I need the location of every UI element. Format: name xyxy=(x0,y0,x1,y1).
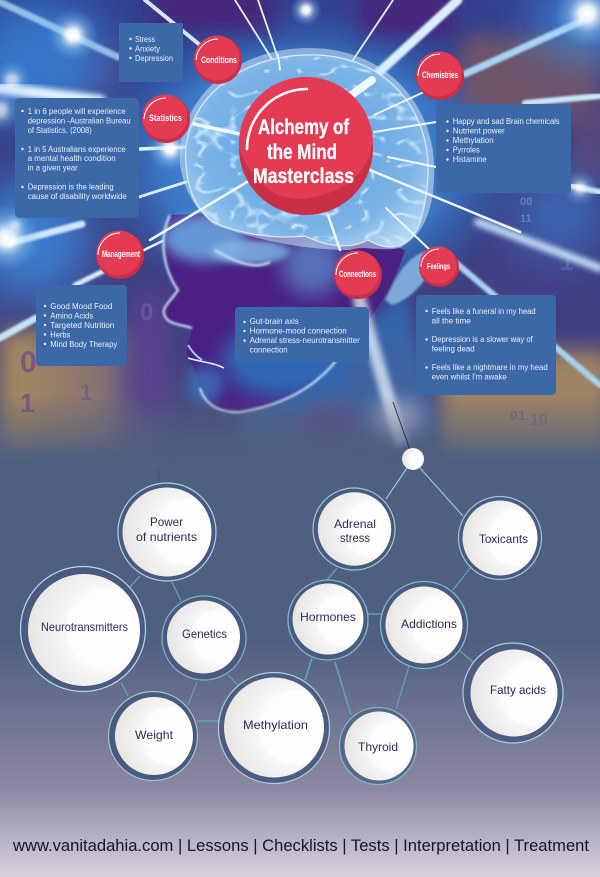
panel: conditions xyxy=(119,23,183,82)
panel: statistics: 1 in 5 Australians experience xyxy=(28,145,126,154)
orb: Toxicants xyxy=(458,496,542,580)
background binary digits: 1 xyxy=(518,13,531,40)
orb: Fatty acids: Fatty acids xyxy=(490,683,546,697)
orb: Addictions xyxy=(380,582,468,668)
background binary digits: 01 xyxy=(510,407,526,423)
panel: statistics: 1 in 6 people will experience xyxy=(28,107,126,116)
panel: conditions: Depression xyxy=(135,54,173,63)
panel: chemistries: Nutrient power xyxy=(453,126,505,136)
orb: Methylation xyxy=(218,672,330,784)
background binary digits xyxy=(20,13,573,429)
panel: feelings: even whilst I'm awake xyxy=(432,372,507,382)
panel: statistics: depression -Australian Bureau xyxy=(28,116,131,126)
panel: feelings xyxy=(416,295,556,395)
central circle: title: Masterclass xyxy=(253,165,354,188)
background binary digits: 10 xyxy=(530,412,548,429)
central circle: title: the Mind xyxy=(267,141,337,164)
panel: chemistries: Histamine xyxy=(453,155,487,164)
panel: chemistries xyxy=(436,104,571,193)
orb: Fatty acids xyxy=(463,643,563,743)
node: Feelings xyxy=(419,246,459,287)
panel: statistics: of Statistics. (2008) xyxy=(28,126,92,135)
orb: Weight: Weight xyxy=(135,728,174,742)
panel: statistics: cause of disability worldwide xyxy=(28,192,127,201)
panel: management: Good Mood Food xyxy=(50,302,112,311)
orb: Adrenal stress: Adrenal xyxy=(334,517,376,531)
panel: feelings: Depression is a slower way of xyxy=(432,335,533,344)
rays over brain xyxy=(150,55,520,252)
panel: management: Herbs xyxy=(50,330,70,340)
central circle: title xyxy=(239,77,373,215)
background binary digits: 00 xyxy=(520,196,532,208)
panel: statistics xyxy=(15,98,139,218)
node: Connections xyxy=(334,250,382,299)
background binary digits: 1 xyxy=(142,364,152,384)
light rays xyxy=(0,0,600,385)
orb: Weight xyxy=(108,692,198,780)
panel: chemistries: Methylation xyxy=(453,136,494,145)
background binary digits: 11 xyxy=(520,213,532,225)
panel: feelings: all the time xyxy=(432,316,471,326)
panel: management: Amino Acids xyxy=(50,312,93,320)
panel: connections: connection xyxy=(250,346,288,354)
panel: connections: Gut-brain axis xyxy=(250,317,299,326)
orb: Adrenal stress xyxy=(313,488,395,570)
node: Feelings: Feelings xyxy=(427,261,450,271)
orb: Power of nutrients: Power xyxy=(150,515,183,529)
panel: connections: Adrenal stress-neurotransmitter xyxy=(250,336,360,345)
central circle: title: Alchemy of xyxy=(258,116,350,139)
panel: management: Targeted Nutrition xyxy=(50,321,114,330)
orb: Methylation: Methylation xyxy=(243,718,308,732)
panel: feelings: Feels like a funeral in my head xyxy=(432,307,536,316)
node: Chemistries: Chemistries xyxy=(422,70,458,81)
orb: Genetics: Genetics xyxy=(182,627,227,641)
head and face xyxy=(0,210,600,480)
node: Management xyxy=(96,230,144,279)
connector lines xyxy=(121,402,473,721)
panel: feelings: Feels like a nightmare in my head xyxy=(432,363,548,372)
lens flares xyxy=(0,0,600,272)
orb: Adrenal stress: stress xyxy=(340,531,370,545)
panel: connections: Hormone-mood connection xyxy=(250,326,347,336)
panel: conditions: Anxiety xyxy=(135,44,160,54)
panel: management: Mind Body Therapy xyxy=(50,340,117,349)
panel: conditions: Stress xyxy=(135,35,155,44)
orb: Power of nutrients: of nutrients xyxy=(136,530,197,544)
panel: statistics: in a given year xyxy=(28,164,78,172)
brain illustration xyxy=(175,45,440,255)
panel: statistics: a mental health condition xyxy=(28,154,116,163)
panel: statistics: Depression is the leading xyxy=(28,182,114,192)
node: Statistics xyxy=(142,94,190,143)
footer links: www.vanitadahia.com | Lessons | Checklists | Tests | Interpretation | Treatment xyxy=(12,836,589,855)
orb: Neurotransmitters xyxy=(20,566,146,692)
orb: Thyroid: Thyroid xyxy=(358,740,398,754)
background binary digits: 1 xyxy=(20,388,34,418)
orb: Addictions: Addictions xyxy=(401,617,457,631)
node: Conditions xyxy=(194,36,242,84)
panel: chemistries: Pyrroles xyxy=(453,146,480,154)
orb: Thyroid xyxy=(340,708,416,784)
orb: Hormones xyxy=(288,580,368,660)
node: Management: Management xyxy=(102,249,141,260)
orb: Toxicants: Toxicants xyxy=(479,532,528,546)
node: Statistics: Statistics xyxy=(149,113,182,124)
orb: top connector xyxy=(402,448,424,470)
background binary digits: 1 xyxy=(80,380,92,405)
background binary digits: 0 xyxy=(140,299,153,326)
background binary digits: 0 xyxy=(20,346,37,379)
panel: management xyxy=(36,285,127,366)
node: Connections: Connections xyxy=(339,269,376,280)
panel: chemistries: Happy and sad Brain chemicals xyxy=(453,117,560,126)
orb: Genetics xyxy=(162,596,246,680)
orb: Power of nutrients xyxy=(118,483,216,581)
panel: connections xyxy=(235,307,369,362)
node: Conditions: Conditions xyxy=(201,55,237,66)
background binary digits: 1 xyxy=(560,249,573,276)
orb: Hormones: Hormones xyxy=(300,610,356,624)
node: Chemistries xyxy=(416,52,464,100)
panel: feelings: feeling dead xyxy=(432,344,475,354)
orb: Neurotransmitters: Neurotransmitters xyxy=(41,620,128,634)
